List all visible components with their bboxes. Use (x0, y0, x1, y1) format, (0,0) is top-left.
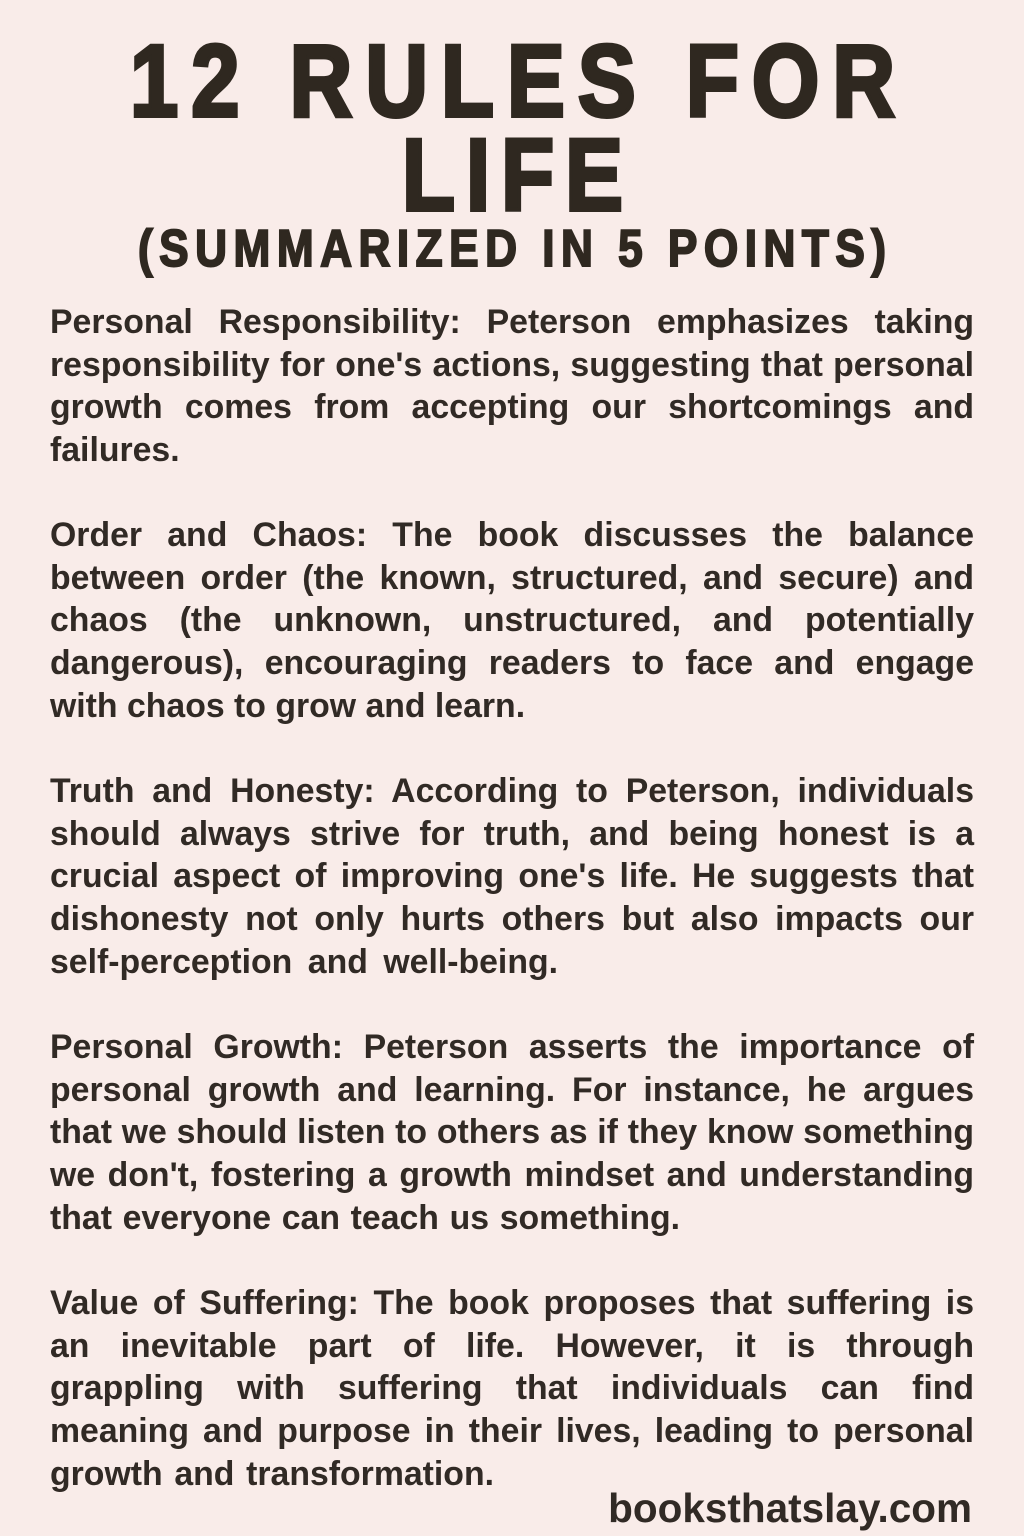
text block: order and chaos: chaos (the unknown, unstructured, and potentially (50, 601, 974, 639)
text block: personal responsibility: responsibility for one's actions, suggesting that personal (50, 346, 974, 384)
text block: personal growth: that we should listen to others as if they know something (50, 1113, 974, 1151)
text block: value of suffering: meaning and purpose in their lives, leading to personal (50, 1412, 974, 1450)
title (130, 24, 895, 233)
text block: truth and honesty: dishonesty not only hurts others but also impacts our (50, 900, 974, 938)
text block: value of suffering: grappling with suffering that individuals can find (50, 1369, 974, 1407)
text block: order and chaos: dangerous), encouraging readers to face and engage (50, 644, 974, 682)
text block: truth and honesty (50, 772, 974, 981)
subtitle: (SUMMARIZED IN 5 POINTS) (138, 220, 886, 278)
text block: personal responsibility (50, 303, 974, 469)
text block: order and chaos (50, 516, 974, 725)
text block: truth and honesty: should always strive for truth, and being honest is a (50, 815, 974, 853)
title: 12 RULES FOR (130, 24, 895, 139)
text block: order and chaos: with chaos to grow and learn. (50, 687, 525, 725)
text block: personal responsibility: failures. (50, 431, 180, 469)
heading (130, 24, 896, 278)
text block: personal growth (50, 1028, 974, 1237)
text block: personal growth: Personal Growth: Peterson asserts the importance of (50, 1028, 974, 1066)
text block: personal growth: that everyone can teach us something. (50, 1199, 680, 1237)
text block: value of suffering: growth and transformation. (50, 1455, 494, 1493)
text block: personal growth: we don't, fostering a growth mindset and understanding (50, 1156, 974, 1194)
text block: truth and honesty: crucial aspect of improving one's life. He suggests that (50, 857, 974, 895)
text block: personal responsibility: Personal Responsibility: Peterson emphasizes taking (50, 303, 974, 341)
text block: order and chaos: between order (the known, structured, and secure) and (50, 559, 974, 597)
text block: truth and honesty: Truth and Honesty: According to Peterson, individuals (50, 772, 974, 810)
text block: order and chaos: Order and Chaos: The book discusses the balance (50, 516, 974, 554)
text block: truth and honesty: self-perception and well-being. (50, 943, 558, 981)
text block: value of suffering: an inevitable part of life. However, it is through (50, 1327, 974, 1365)
text block: value of suffering (50, 1284, 974, 1493)
text block: personal growth: personal growth and learning. For instance, he argues (50, 1071, 974, 1109)
title: LIFE (402, 118, 623, 233)
text block: personal responsibility: growth comes from accepting our shortcomings and (50, 388, 974, 426)
text block: value of suffering: Value of Suffering: The book proposes that suffering is (50, 1284, 974, 1322)
footer: website: booksthatslay.com (608, 1485, 972, 1531)
